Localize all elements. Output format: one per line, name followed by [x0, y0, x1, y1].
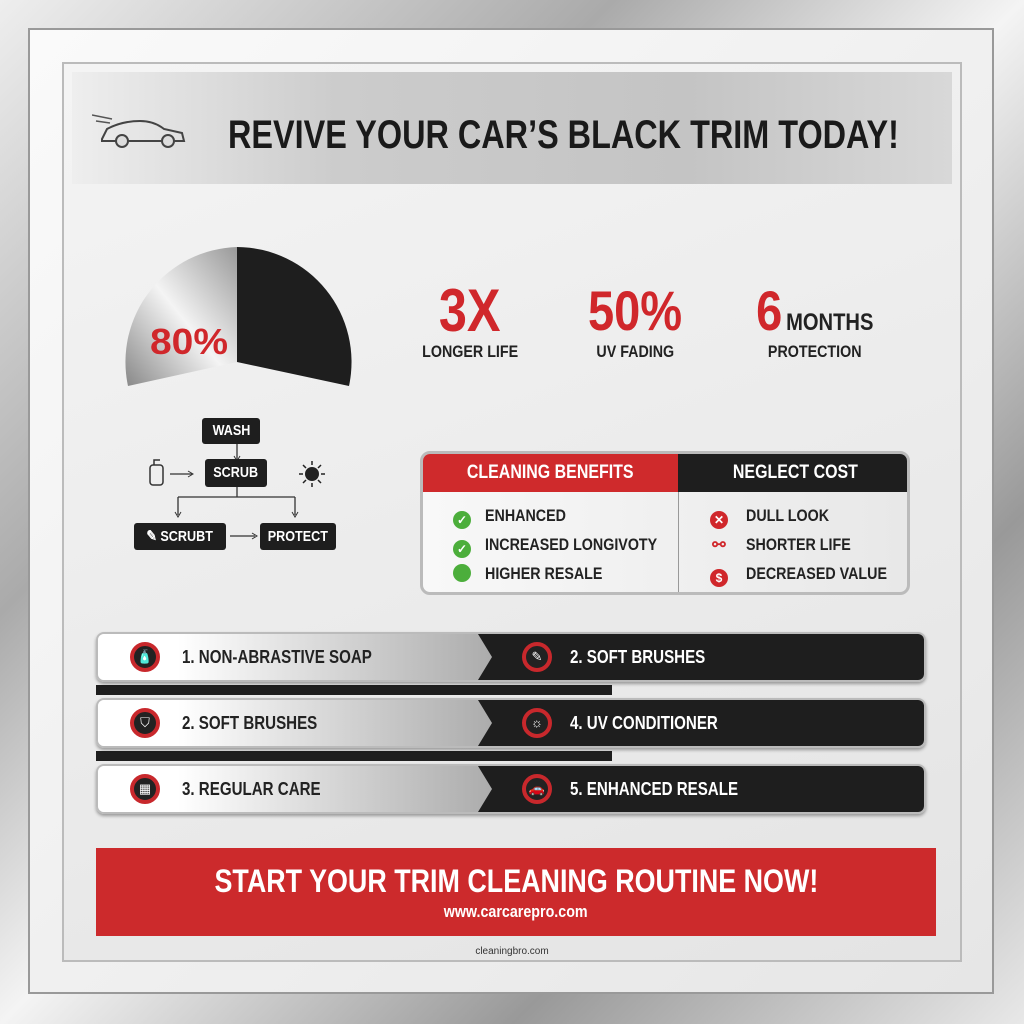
row 2: ⛉ [140, 715, 150, 730]
neglect list: SHORTER LIFE [746, 535, 851, 554]
neglect list [710, 506, 887, 587]
footer text: cleaningbro.com [475, 946, 549, 957]
benefits list [453, 506, 657, 583]
row 1 [96, 632, 926, 682]
row 1: 🧴 [137, 649, 153, 664]
box scrubt: ✎ SCRUBT [147, 528, 213, 545]
stat 50%: UV FADING [596, 342, 674, 361]
stat 50%: 50% [588, 279, 682, 342]
header band [72, 72, 952, 184]
stat 3X [422, 277, 518, 361]
benefits list: HIGHER RESALE [485, 564, 602, 583]
neglect list: ⚯ [712, 537, 726, 554]
row 1: 1. NON-ABRASTIVE SOAP [182, 647, 372, 667]
benefits list: ENHANCED [485, 506, 566, 525]
pie chart: 80% [150, 321, 228, 362]
row 2 [96, 698, 926, 748]
CTA banner [96, 848, 936, 936]
box protect [260, 523, 336, 550]
row 3: ▦ [139, 781, 151, 796]
header: cleaning benefits: CLEANING BENEFITS [467, 462, 634, 483]
box wash [202, 418, 260, 444]
row 2: 2. SOFT BRUSHES [182, 713, 317, 733]
benefits list: ✓ [457, 542, 467, 556]
pie chart [126, 247, 352, 386]
box scrubt [134, 523, 226, 550]
box protect: PROTECT [268, 528, 328, 545]
header: neglect cost: NEGLECT COST [733, 462, 858, 483]
stat 6 months: 6 MONTHS [756, 279, 874, 342]
row 1: ✎ [532, 649, 542, 664]
row 3: 5. ENHANCED RESALE [570, 779, 738, 799]
stat 3X: LONGER LIFE [422, 342, 518, 361]
stat 3X: 3X [439, 277, 501, 344]
box scrub: SCRUB [214, 464, 258, 481]
benefits list: ✓ [457, 513, 467, 527]
stat 6 months: PROTECTION [768, 342, 862, 361]
row 3: 🚗 [529, 781, 545, 796]
comparison table [420, 451, 910, 595]
benefits list: INCREASED LONGIVOTY [485, 535, 657, 554]
neglect list: $ [716, 571, 722, 585]
stats [422, 277, 874, 361]
CTA banner: www.carcarepro.com [444, 902, 588, 921]
neglect list: ✕ [714, 513, 724, 527]
CTA banner: START YOUR TRIM CLEANING ROUTINE NOW! [214, 863, 818, 899]
flowchart [134, 418, 336, 550]
title: REVIVE YOUR CAR’S BLACK TRIM TODAY! [228, 113, 899, 157]
neglect list: DECREASED VALUE [746, 564, 887, 583]
row 3 [96, 764, 926, 814]
header: neglect cost [678, 454, 913, 492]
row 3: 3. REGULAR CARE [182, 779, 321, 799]
row 2: 4. UV CONDITIONER [570, 713, 718, 733]
icon: car [92, 114, 186, 148]
row 2: ☼ [531, 715, 543, 730]
header: cleaning benefits [423, 454, 678, 492]
row 1: 2. SOFT BRUSHES [570, 647, 705, 667]
box wash: WASH [212, 422, 250, 439]
box scrub [205, 459, 267, 487]
steps rows [94, 632, 928, 818]
neglect list: DULL LOOK [746, 506, 829, 525]
